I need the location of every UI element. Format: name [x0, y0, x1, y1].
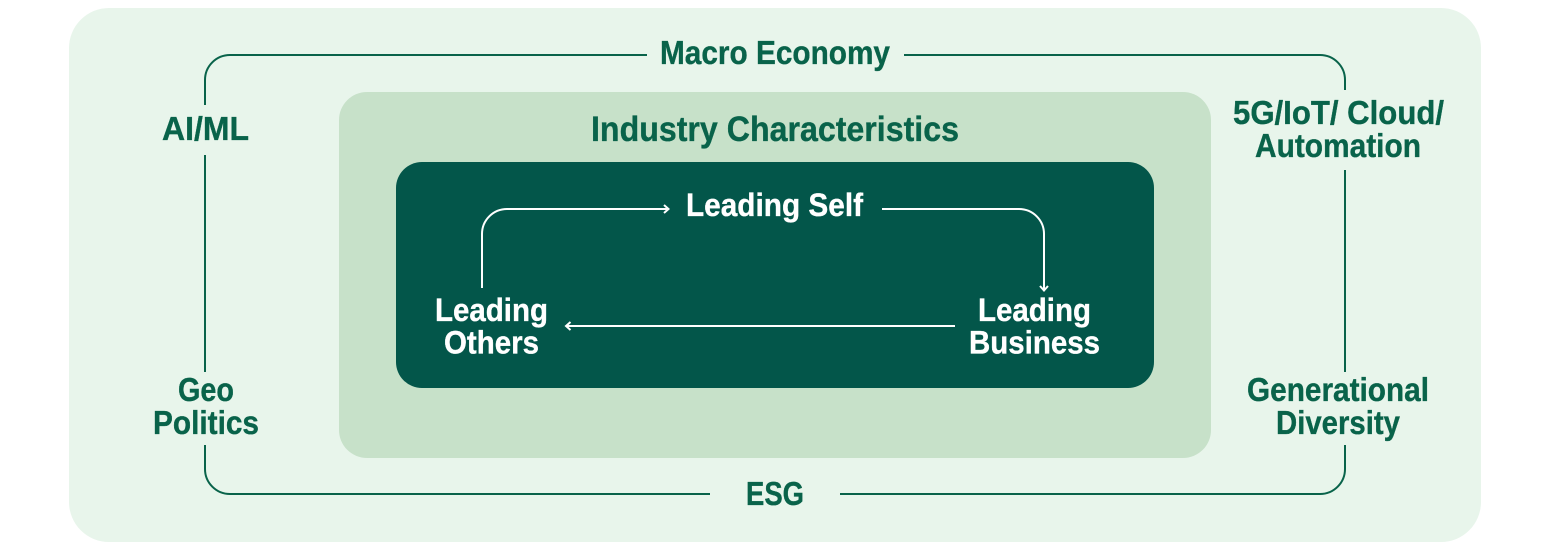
label: Geo Politics: Geo: [178, 371, 234, 408]
label: ESG: ESG: [746, 475, 804, 512]
label: Generational Diversity: [1247, 371, 1429, 441]
label: Leading Others: Leading: [435, 292, 548, 328]
label: Geo Politics: Politics: [153, 404, 259, 441]
label: Leading Business: Business: [969, 324, 1100, 360]
label: Leading Self: Leading Self: [686, 187, 863, 223]
heading: Industry Characteristics: Industry Characteristics: [591, 110, 959, 149]
label: 5G/IoT/Cloud/Automation: 5G/IoT/ Cloud/: [1233, 94, 1444, 131]
panel: leadership core: [396, 162, 1154, 388]
frame line: external forces: [205, 55, 1345, 494]
arrow: business to others: [566, 322, 955, 330]
label: Geo Politics: [153, 371, 259, 441]
label: Generational Diversity: Diversity: [1276, 404, 1401, 441]
label: Leading Others: Others: [444, 324, 539, 360]
label: 5G/IoT/Cloud/Automation: [1233, 94, 1444, 164]
label: Leading Business: Leading: [978, 292, 1091, 328]
arrow: self to business: [882, 209, 1048, 290]
label: Leading Others: [435, 292, 548, 360]
panel: industry characteristics: [339, 92, 1211, 458]
heading: Macro Economy: Macro Economy: [660, 34, 891, 71]
label: Generational Diversity: Generational: [1247, 371, 1429, 408]
label: 5G/IoT/Cloud/Automation: Automation: [1255, 127, 1421, 164]
label: Leading Business: [969, 292, 1100, 360]
arrow: others to self: [482, 205, 668, 288]
label: AI/ML: AI/ML: [162, 110, 249, 147]
